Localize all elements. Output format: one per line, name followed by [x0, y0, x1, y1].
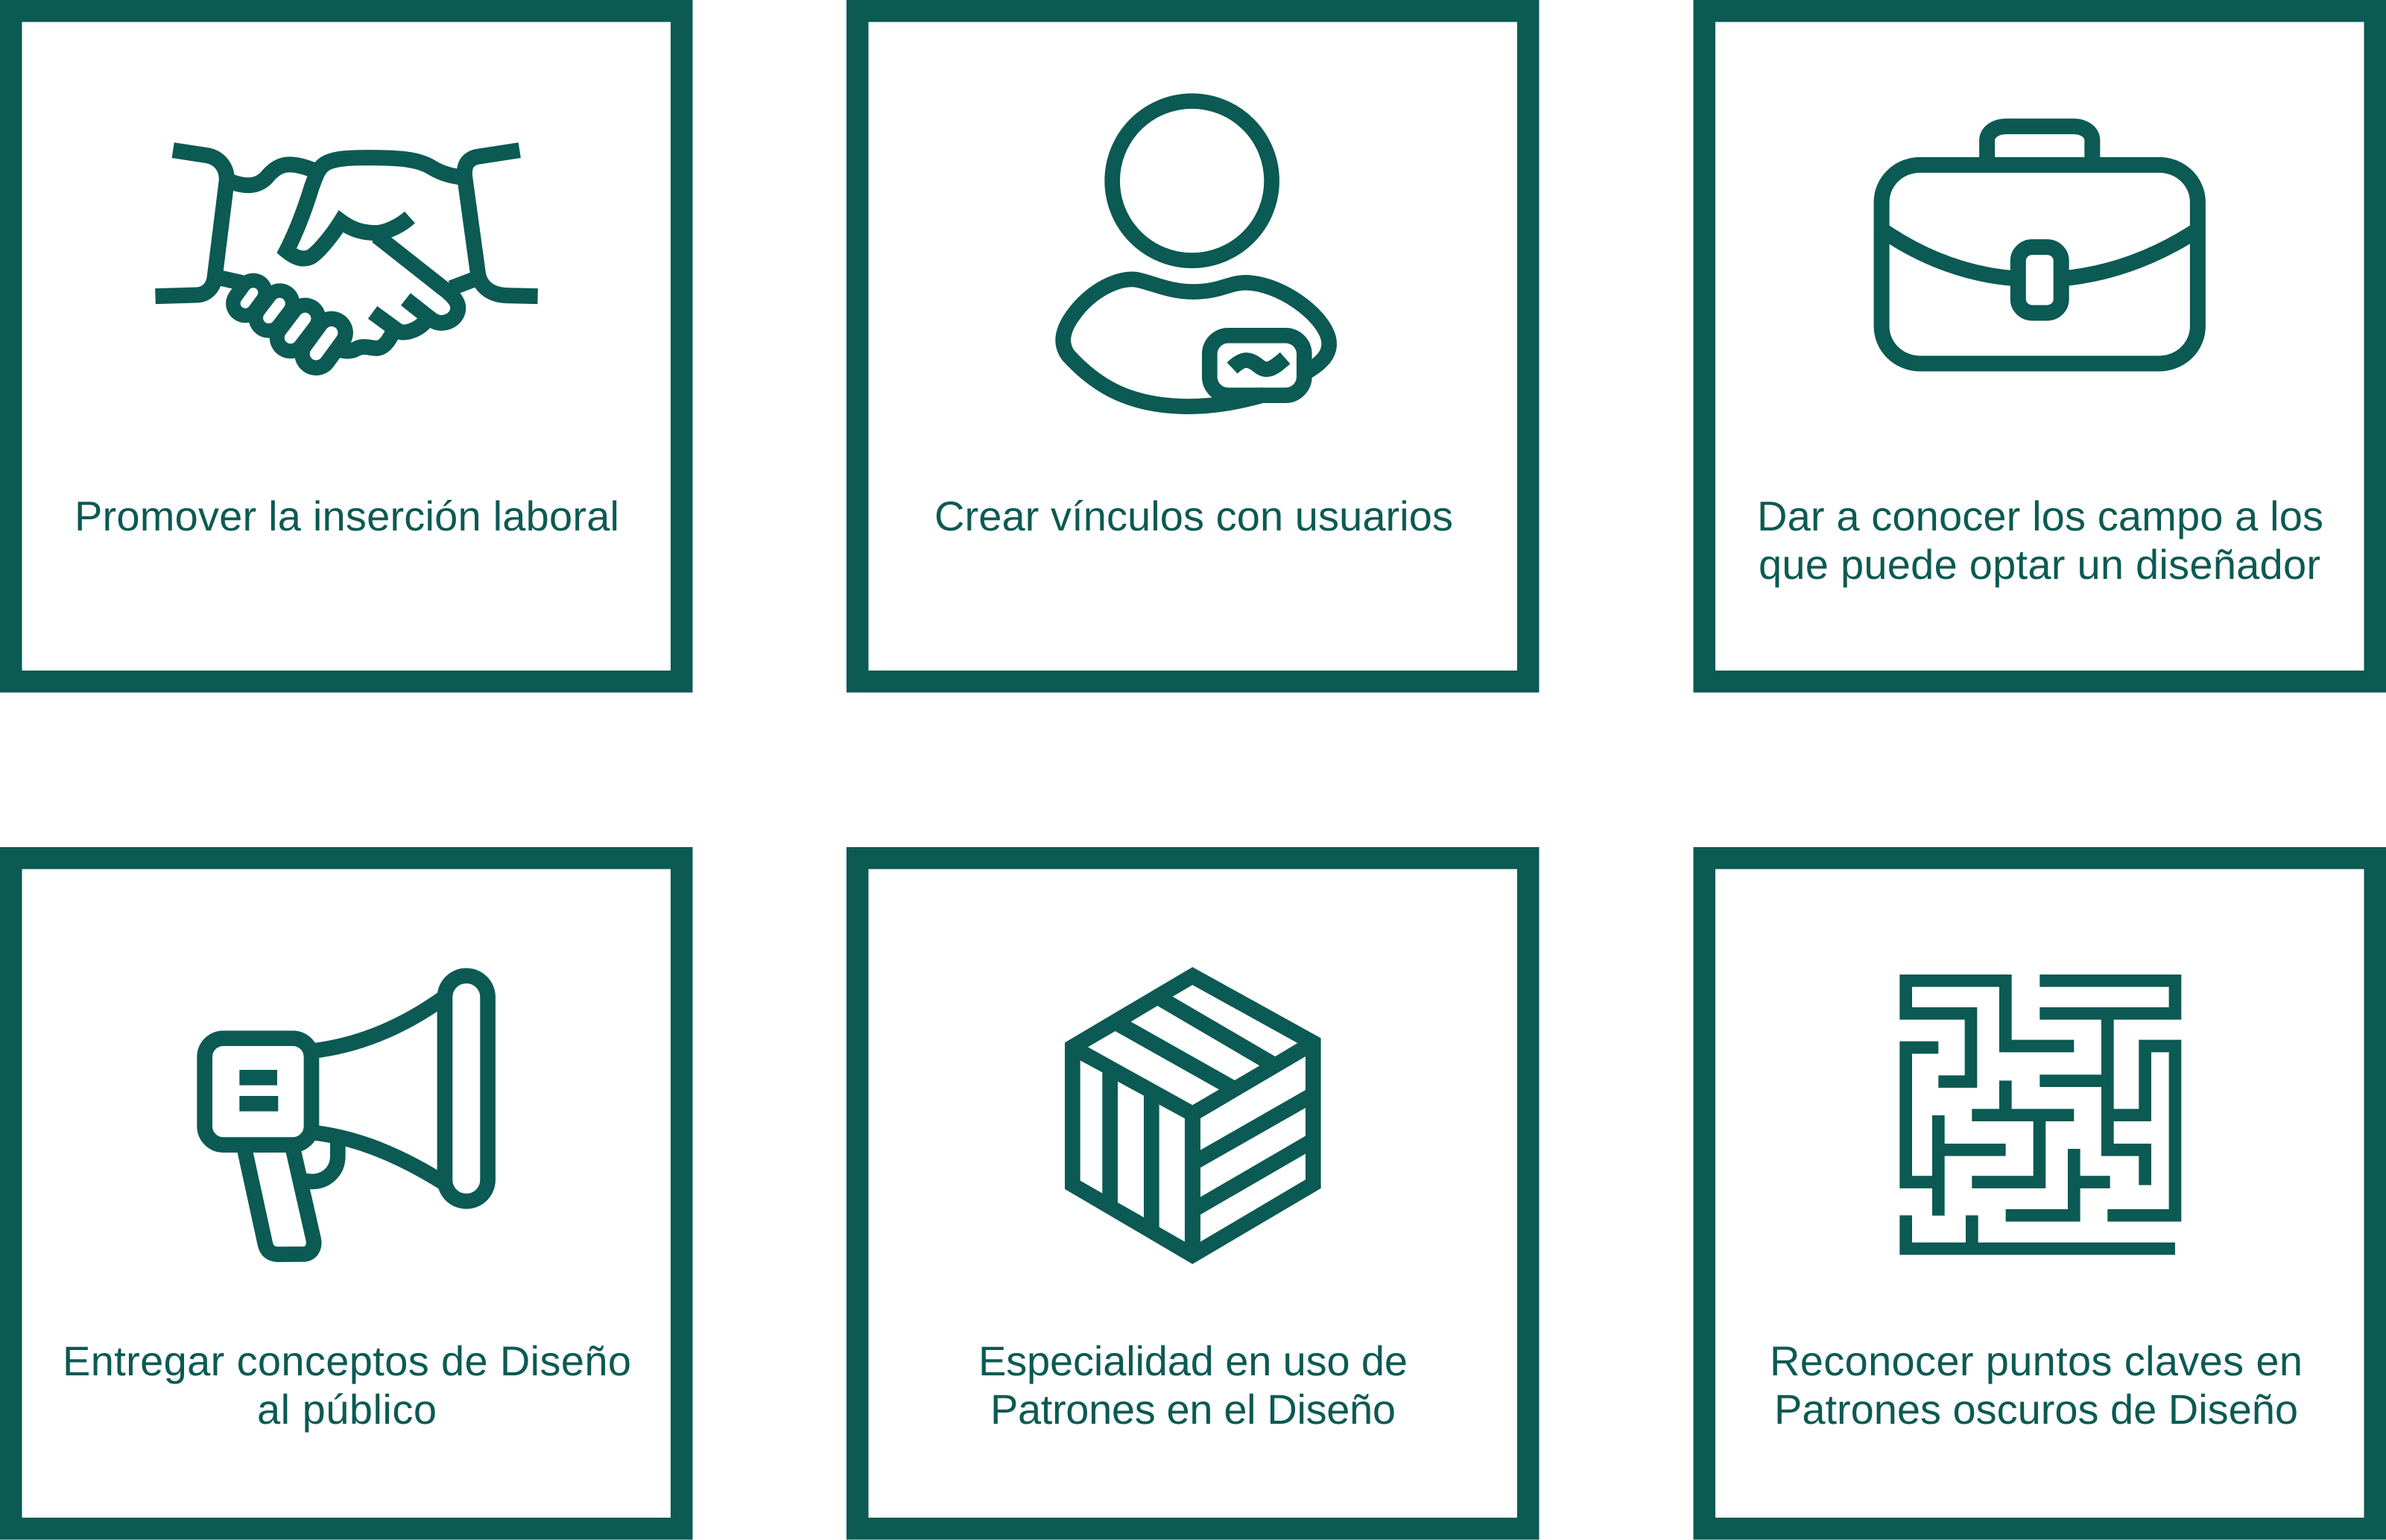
panel frame	[1704, 11, 2375, 682]
label: crear vínculos: Crear vínculos con usuarios	[934, 492, 1453, 539]
label: dar a conocer, second line: que puede optar un diseñador	[1759, 541, 2320, 588]
label: patrones oscuros: Patrones oscuros de Diseño	[1774, 1386, 2298, 1433]
label: dar a conocer: Dar a conocer los campo a los	[1757, 492, 2323, 539]
panel: especialidad en uso de patrones	[858, 858, 1528, 1529]
label: reconocer puntos claves: Reconocer puntos claves en	[1770, 1337, 2303, 1384]
panel frame	[858, 858, 1528, 1529]
icon: crate box	[1065, 967, 1321, 1264]
icon: briefcase	[1882, 127, 2197, 364]
panel frame	[11, 858, 682, 1529]
panel frame	[858, 11, 1528, 682]
icon: handshake	[155, 150, 538, 354]
label: patrones en el diseño: Patrones en el Diseño	[990, 1386, 1396, 1433]
label: entregar conceptos: Entregar conceptos de Diseño	[63, 1337, 631, 1384]
label: especialidad: Especialidad en uso de	[978, 1337, 1408, 1384]
label: promover: Promover la inserción laboral	[75, 492, 619, 539]
panel frame	[11, 11, 682, 682]
panel: crear vínculos con usuarios	[858, 11, 1528, 682]
icon: user with badge	[1063, 101, 1329, 407]
panel: dar a conocer los campos	[1704, 11, 2375, 682]
icon: maze	[1906, 980, 2175, 1249]
panel: promover la inserción laboral	[11, 11, 682, 682]
icon: megaphone	[205, 976, 488, 1255]
label: al público: al público	[257, 1386, 437, 1433]
panel: entregar conceptos	[11, 858, 682, 1529]
panel: patrones oscuros	[1704, 858, 2375, 1529]
panel frame	[1704, 858, 2375, 1529]
